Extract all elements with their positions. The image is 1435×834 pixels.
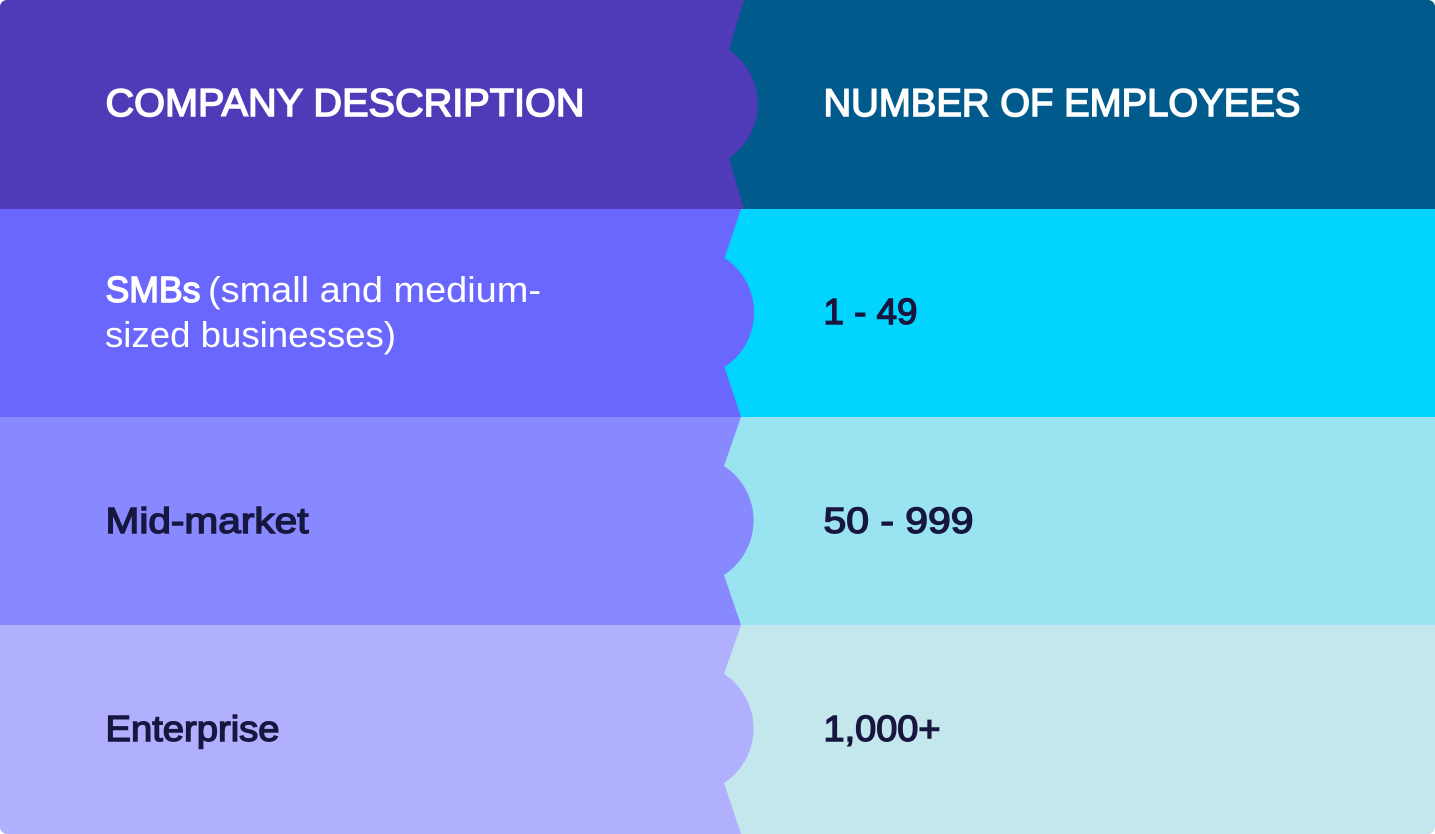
heading: company description: COMPANY DESCRIPTION — [106, 82, 584, 125]
header row — [0, 0, 1435, 209]
text: enterprise: Enterprise — [106, 708, 280, 749]
value: 1 - 49: 1 - 49 — [824, 291, 918, 332]
text: SMBs description — [105, 269, 541, 355]
text: SMBs description: (small and medium- — [208, 269, 541, 310]
panel: mid-market employee count — [700, 417, 1435, 625]
panel: enterprise employee count — [700, 625, 1435, 834]
row: enterprise — [0, 625, 1435, 834]
value: 1,000+: 1,000+ — [824, 708, 940, 749]
panel: number of employees header — [700, 0, 1435, 209]
heading: number of employees: NUMBER OF EMPLOYEES — [824, 82, 1300, 125]
row: mid-market — [0, 417, 1435, 625]
row: SMBs — [0, 209, 1435, 417]
panel: mid-market description — [0, 417, 754, 625]
value: 50 - 999: 50 - 999 — [824, 500, 974, 541]
text: SMBs description: SMBs — [106, 269, 200, 310]
text: mid-market: Mid-market — [106, 500, 308, 541]
panel: enterprise description — [0, 625, 754, 834]
panel: SMBs description — [0, 209, 754, 417]
text: SMBs description: sized businesses) — [105, 314, 396, 355]
panel: SMBs employee count — [700, 209, 1435, 417]
panel: company description header — [0, 0, 758, 209]
